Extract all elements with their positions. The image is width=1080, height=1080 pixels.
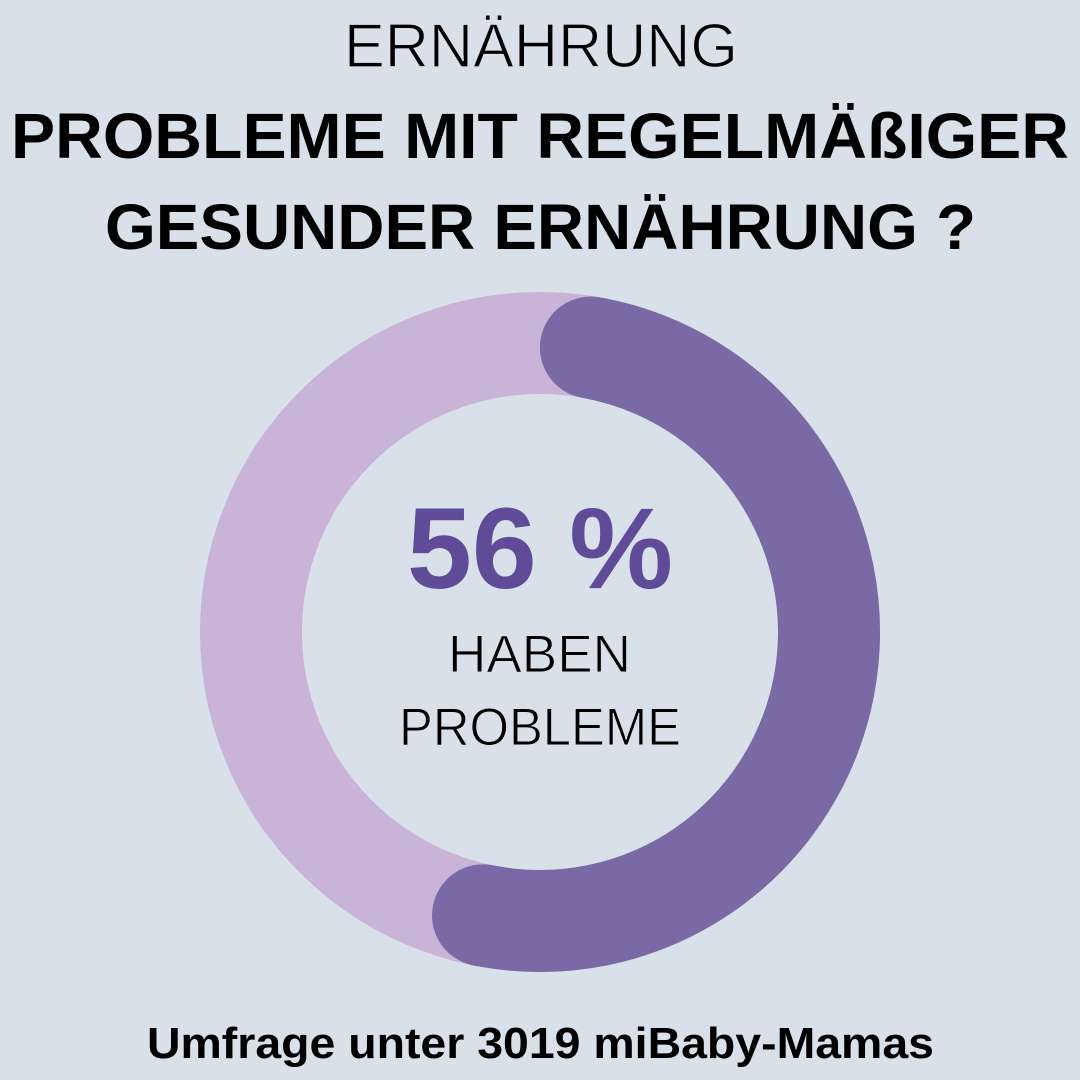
heading: main question: PROBLEME MIT REGELMÄßIGER	[11, 100, 1069, 172]
heading: main question	[11, 100, 1069, 263]
donut remainder ring	[251, 343, 829, 921]
center label: PROBLEME	[399, 698, 681, 757]
center value: 56 percent: 56 %	[407, 485, 673, 613]
donut 56 percent arc	[205, 297, 875, 967]
heading: topic: ERNÄHRUNG	[344, 12, 738, 81]
donut chart	[205, 297, 875, 967]
heading: main question: GESUNDER ERNÄHRUNG ?	[105, 191, 976, 263]
footer: survey source: Umfrage unter 3019 miBaby-Mamas	[147, 1019, 934, 1068]
center label	[399, 625, 681, 757]
center label: HABEN	[448, 625, 631, 684]
